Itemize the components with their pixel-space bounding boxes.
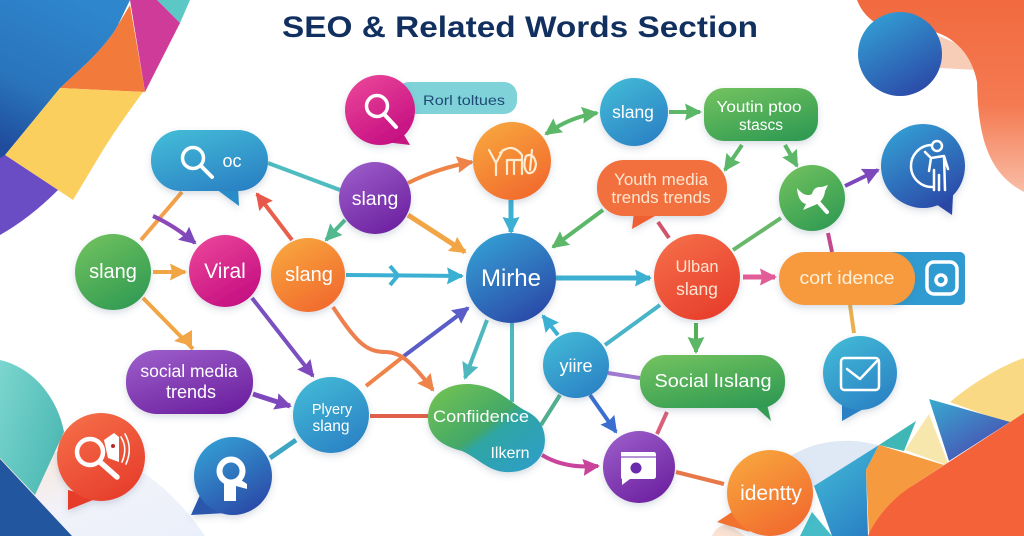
node: Plyery slang: Plyery <box>312 402 353 418</box>
node: Viral <box>189 235 261 307</box>
bubble: blue search pill: oc <box>222 151 242 171</box>
node: red search sound bubble <box>57 413 145 510</box>
arrow: purple slang to orange icon <box>408 162 472 183</box>
decoration: top-right orange blob <box>857 0 1024 192</box>
node: social media trends pill: trends <box>166 382 216 402</box>
pill <box>779 252 915 305</box>
node: identity bubble: identty <box>740 482 802 505</box>
node: green twitter circle <box>779 165 845 231</box>
pink search bubble <box>345 75 415 145</box>
line: yiire to social lslang <box>608 373 640 378</box>
icon: keyhole badge <box>220 460 242 482</box>
node: green slang <box>75 234 151 310</box>
node: Urban slang <box>654 234 740 320</box>
line: urban to yiire <box>605 305 660 345</box>
node: yiire: yiire <box>559 356 593 376</box>
node: blue key bubble <box>191 437 272 515</box>
node: green slang: slang <box>89 261 137 283</box>
arrow: green slang to social media <box>143 298 193 349</box>
line: plyery to hub, orange part <box>366 356 404 386</box>
node: Urban slang: slang <box>676 279 718 299</box>
arrow: confidence to video <box>542 455 598 467</box>
node: purple slang <box>339 162 411 234</box>
arrow: social media to plyery <box>253 394 290 406</box>
arrow: orange icon and teal slang two-way <box>546 113 597 134</box>
icon: camera <box>927 262 957 294</box>
node: orange slang <box>271 238 345 312</box>
arrow: orange slang to confidence blob <box>333 307 433 390</box>
node: identity bubble <box>717 450 813 536</box>
arrow: purple slang to orange slang <box>326 220 345 240</box>
node: confidence / Ilkern blob <box>428 384 545 472</box>
icon: bird with magnifier <box>797 185 828 210</box>
arrow: orange pill to hub <box>553 210 603 247</box>
decoration: top-right blue circle <box>858 12 942 96</box>
node: Plyery slang <box>293 377 369 453</box>
icon: ring and person <box>911 141 948 190</box>
arrow: plyery to hub <box>404 308 468 356</box>
node: main hub Mirhe <box>466 233 556 323</box>
arrow: yiire to hub <box>543 316 558 335</box>
arrow: green slang to viral <box>153 270 185 274</box>
node: confidence / Ilkern blob: Ilkern <box>490 445 530 462</box>
node: mail bubble <box>823 336 897 421</box>
node: teal slang <box>600 78 668 146</box>
icon: arches <box>489 148 536 175</box>
decoration: bottom-right geometric shapes <box>712 358 1024 536</box>
arrow: yiire to video <box>590 395 616 432</box>
node: orange icon circle <box>473 122 551 200</box>
label pill <box>396 82 517 114</box>
node: orange youth media pill: trends trends <box>611 188 711 207</box>
line: twitter to urban <box>733 218 781 250</box>
line: orange pill to urban <box>658 222 669 238</box>
node: green box: stascs <box>739 117 783 134</box>
line: blue pill to green slang <box>141 192 182 240</box>
label text: Rorl toltues <box>423 92 505 108</box>
arrow: orange slang to hub <box>346 275 462 276</box>
arrow: hub to confidence <box>465 320 487 378</box>
node: yiire <box>543 332 609 398</box>
node: social media trends pill: social media <box>140 361 238 381</box>
icon: browser video <box>621 452 656 485</box>
line: key bubble to plyery <box>270 440 296 458</box>
arrow: purple to viral <box>153 216 195 243</box>
arrow: hub to urban <box>556 276 650 280</box>
node: Urban slang: Ulban <box>675 258 719 276</box>
arrow: orange icon to hub <box>508 200 514 232</box>
node: Plyery slang: slang <box>312 418 350 435</box>
line: video to identity <box>676 472 724 484</box>
arrow: teal slang to green box <box>669 110 700 114</box>
decoration: top-left colour shards <box>0 0 190 235</box>
line: blue pill to purple slang <box>268 163 340 190</box>
icon: magnifier and speaker <box>77 439 117 477</box>
node: social media trends pill <box>126 350 253 414</box>
camera tab <box>880 252 965 305</box>
arrow: green box to orange pill <box>725 145 742 170</box>
title: SEO & Related Words Section <box>282 11 758 44</box>
chevron on orange slang to hub arrow <box>390 266 398 285</box>
node: confidence / Ilkern blob: Confiidence <box>433 407 529 426</box>
arrow: orange slang to blue pill <box>257 194 292 240</box>
arrow: green box to twitter <box>785 145 797 166</box>
node: green box: Youtin ptoo <box>716 99 802 116</box>
node: orange youth media pill <box>597 160 727 229</box>
node: Social lslang bubble <box>640 355 785 421</box>
line: social lslang to video <box>657 412 667 434</box>
bubble: blue search pill <box>151 130 268 206</box>
node: main hub Mirhe: Mirhe <box>481 265 541 292</box>
node: teal slang: slang <box>612 102 654 122</box>
line: plyery to confidence <box>370 414 428 418</box>
arrow: urban to social lslang <box>694 323 698 352</box>
icon: mail <box>841 358 879 390</box>
node: Viral: Viral <box>204 260 246 283</box>
arrow: urban to confidence pill <box>743 274 775 280</box>
line: confidence pill to mail <box>850 305 854 333</box>
node: blue person bubble <box>881 124 965 215</box>
bubble: pink search with teal label <box>345 75 517 145</box>
connector network <box>141 112 878 484</box>
line: yiire to confidence <box>541 395 560 425</box>
node: confidence pill with camera tab: cort idence <box>800 268 894 288</box>
arrow: twitter to person <box>845 170 878 186</box>
arrow: viral to plyery <box>252 298 313 376</box>
node: green box <box>704 88 818 141</box>
node: orange youth media pill: Youth media <box>614 170 708 189</box>
node: purple slang: slang <box>352 188 398 210</box>
node: confidence pill with camera tab <box>779 252 965 305</box>
arrow: purple slang to hub <box>408 215 465 252</box>
decoration: bottom-left shapes <box>0 360 205 536</box>
arrowhead: green slang to social media <box>174 330 192 346</box>
line: hub down to confidence <box>510 322 514 402</box>
node: purple video circle <box>603 431 675 503</box>
icon: magnifier <box>182 148 212 177</box>
node: orange slang: slang <box>285 264 333 286</box>
node: Social lslang bubble: Social lıslang <box>654 371 772 391</box>
line: twitter to confidence pill <box>828 233 832 252</box>
icon: magnifier <box>366 96 396 127</box>
